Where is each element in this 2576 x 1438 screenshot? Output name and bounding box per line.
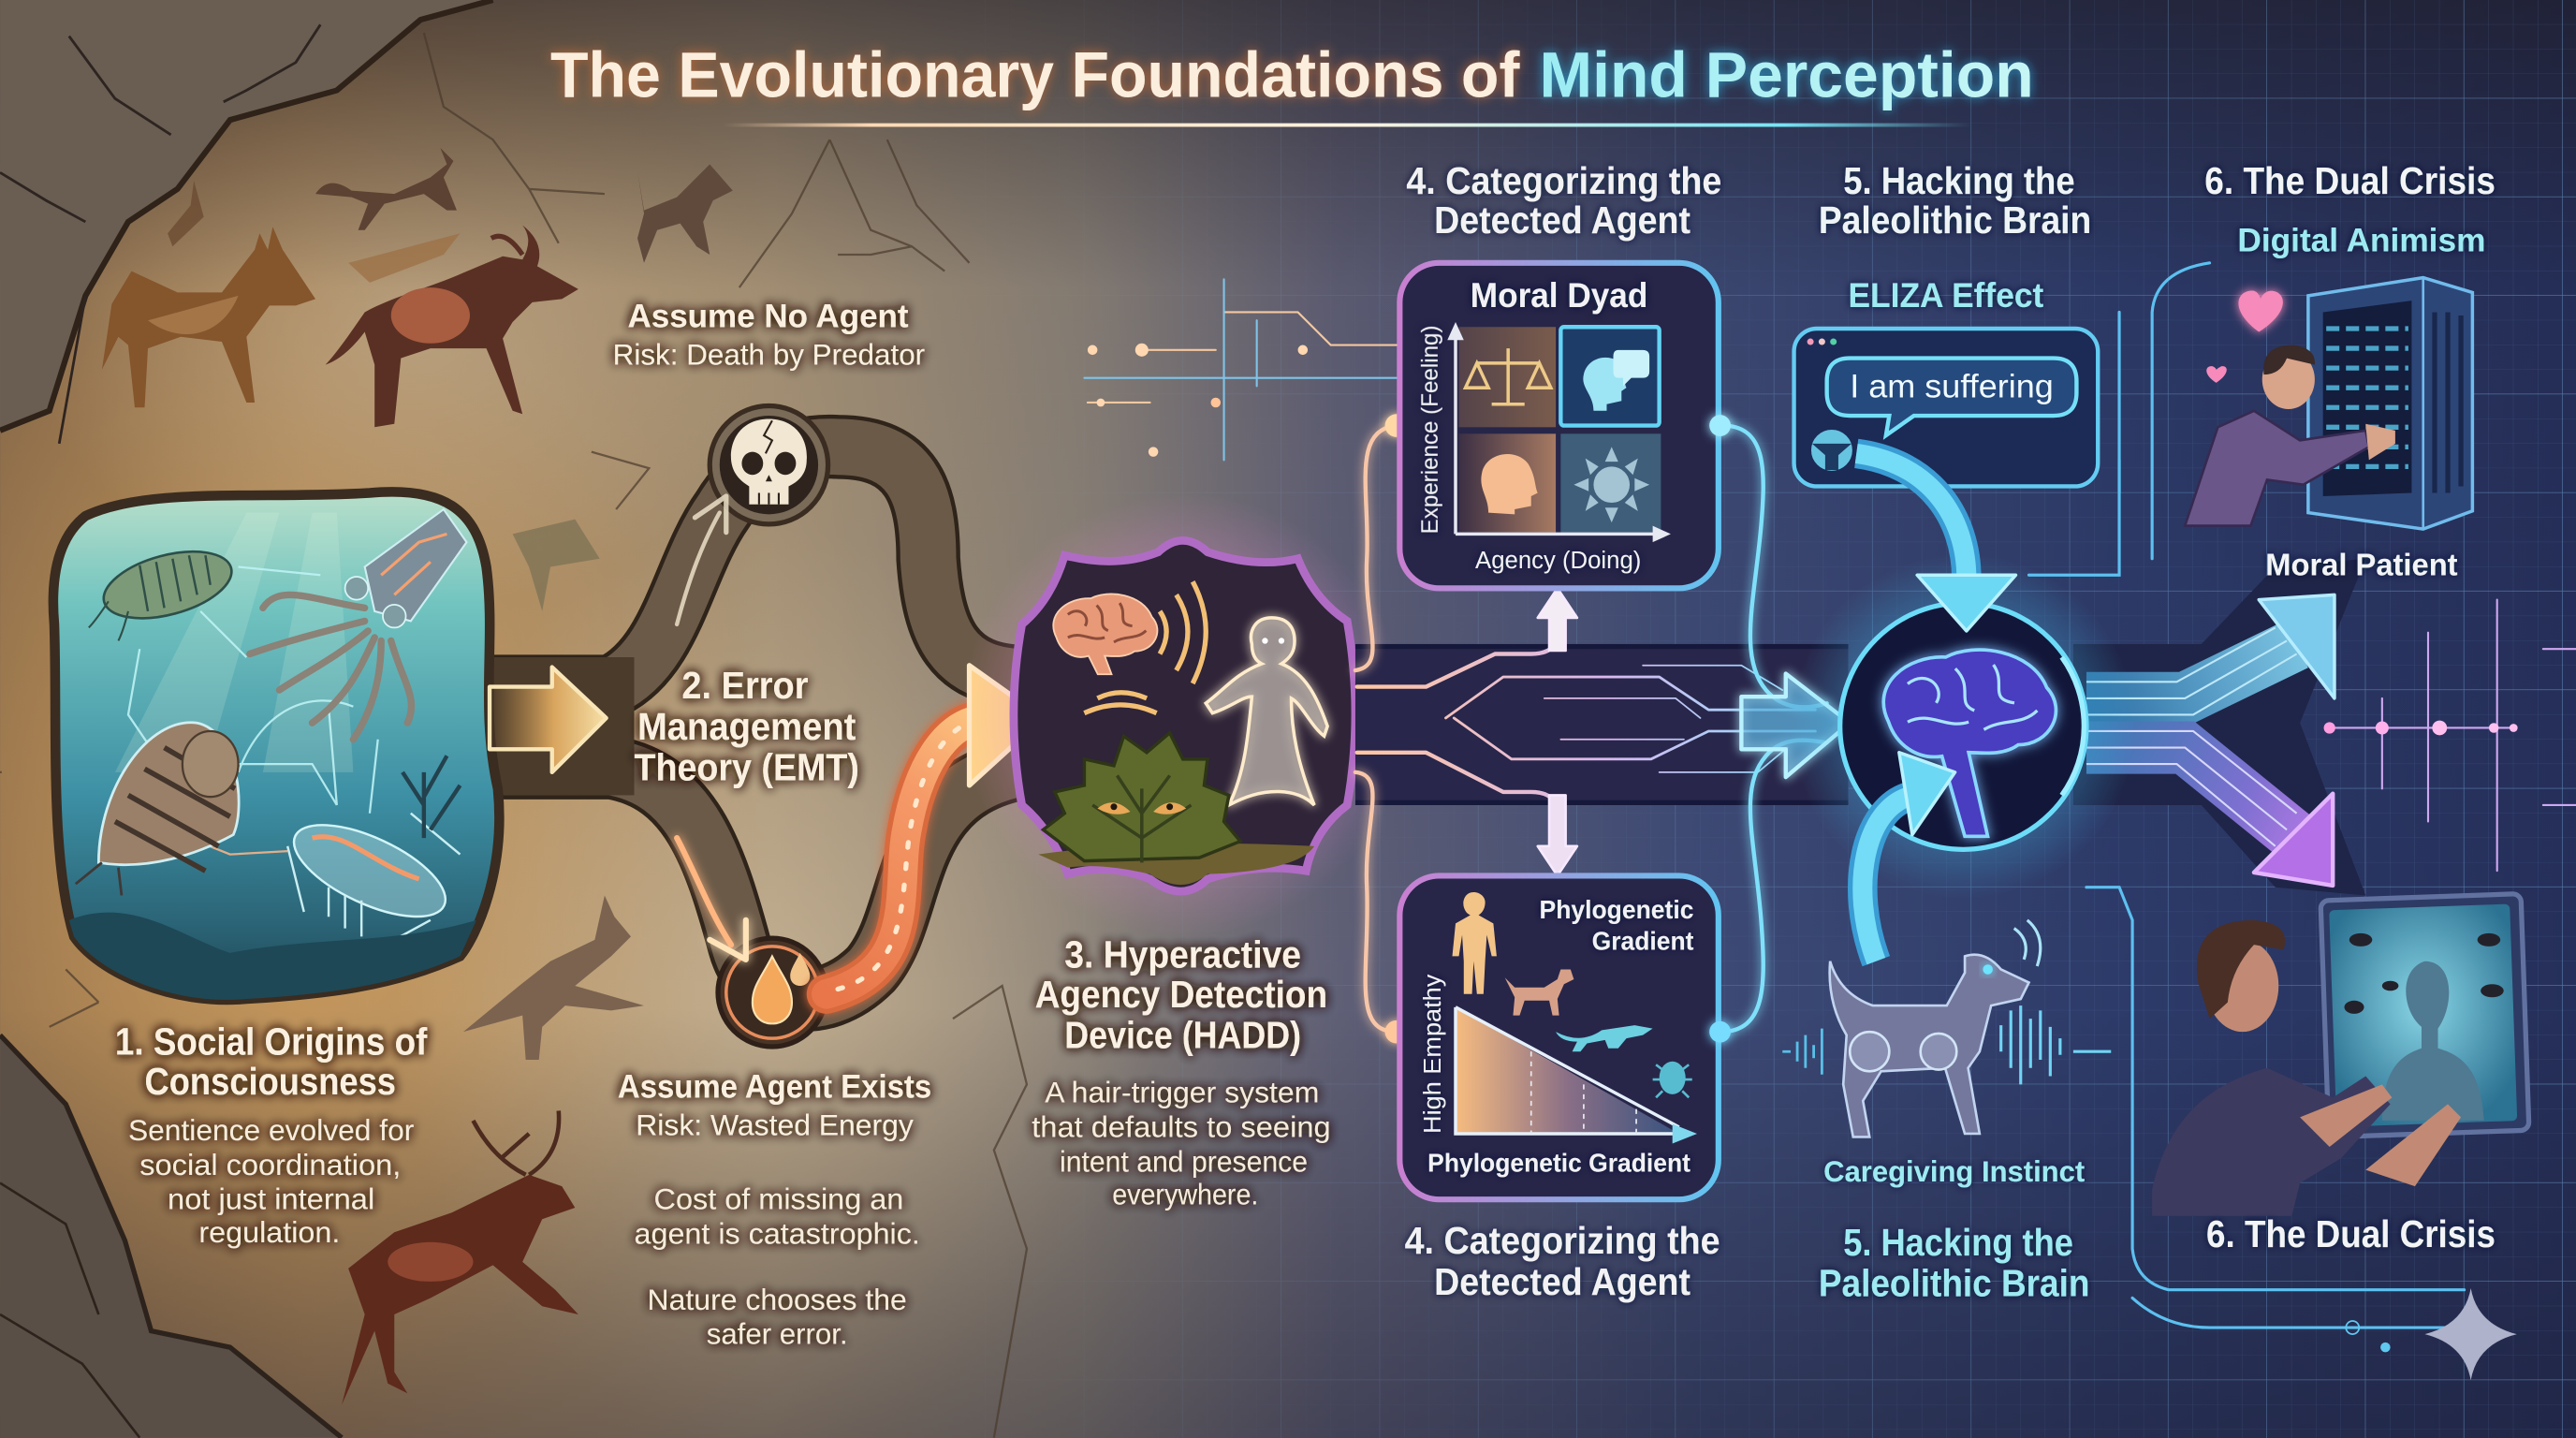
icon: robot dog [1782,920,2111,1137]
cave painting: small horse [637,165,733,263]
cave painting: large goat [326,225,578,427]
heading: hacking bottom: 5. Hacking the [1843,1221,2073,1264]
quadrants [1459,327,1556,427]
squid with glowing nerves [250,509,466,740]
heading: hacking bottom: Paleolithic Brain [1819,1262,2089,1305]
ground [1038,844,1314,885]
heading: hacking top: 5. Hacking the [1843,159,2075,202]
panel: moral dyad [1399,263,1719,588]
title [550,39,2034,111]
cave painting: brown deer [102,227,315,407]
arrow: chat into brain [1856,453,2015,631]
heading: categorizing bottom: 4. Categorizing the [1405,1219,1720,1262]
text: HADD description: intent and presence [1060,1144,1308,1178]
heading: HADD: Agency Detection [1035,973,1327,1016]
text: HADD description: everywhere. [1112,1177,1258,1211]
circuit traces and dots [1084,263,2576,1328]
label: moral patient: Moral Patient [2265,548,2458,582]
labels: moral dyad [1418,276,1647,574]
chat message: I am suffering [1850,369,2054,405]
glowing orange arrow into HADD [827,666,1044,994]
rock ledge bottom left [0,1035,342,1438]
neon brain [1883,650,2056,836]
waveforms [1782,1029,1822,1075]
label: digital animism: Digital Animism [2237,223,2485,259]
icon: sparkle [2424,1288,2517,1380]
heading: categorizing bottom: Detected Agent [1434,1260,1690,1303]
heading: social origins: 1. Social Origins of [115,1020,428,1064]
text: error management explanation: Cost of missing an [654,1182,903,1216]
labels: moral dyad: Moral Dyad [1471,276,1647,315]
cave painting: faded marks [168,181,600,611]
labels: phylogenetic gradient: Phylogenetic [1540,895,1693,924]
electric signal lines [128,566,378,855]
speech bubble [1827,359,2076,435]
text: error management explanation: Nature chooses the [648,1283,907,1316]
connector lines: orange side [1355,414,1408,1043]
arrow: circuit into brain [1741,674,1850,777]
labels: moral dyad: Experience (Feeling) [1418,325,1443,534]
illustration: person hugging server [2185,278,2472,529]
heading: hacking top: Paleolithic Brain [1819,198,2091,242]
connector lines: blue side [1709,415,1827,1043]
server [2308,278,2472,529]
sound waves [1084,581,1206,713]
text: assume agent exists: Assume Agent Exists [618,1068,931,1105]
title underline [723,124,1971,126]
sea floor and coral [69,913,476,1000]
labels: phylogenetic gradient: Gradient [1592,926,1693,955]
rock ledge top left [0,0,493,444]
central circuit band [1351,594,1848,868]
axes [1447,322,1671,542]
heading: error management theory [634,664,859,789]
icon: head [1481,454,1538,514]
text: error management explanation: safer error. [707,1317,848,1351]
central brain hub [1791,553,2136,899]
heading: categorizing top: 4. Categorizing the [1406,159,1721,202]
light rays [115,513,353,772]
labels: phylogenetic gradient: Phylogenetic Gradient [1427,1148,1690,1177]
text: assume no agent [613,298,925,372]
label: ELIZA effect: ELIZA Effect [1848,276,2043,315]
labels: phylogenetic gradient [1418,895,1693,1177]
man [2185,411,2369,526]
ghost figure [1206,618,1327,805]
on-screen figure [2382,961,2484,1121]
text: error management explanation [634,1182,920,1351]
heading: dual crisis top: 6. The Dual Crisis [2204,159,2496,202]
panel: ELIZA chat window [1794,329,2098,486]
icon: scales [1466,348,1551,404]
arrow: ocean to error paths [490,668,607,772]
avatar [1810,429,1853,472]
illustration: person examining tablet [2152,894,2529,1216]
text: error management explanation: agent is catastrophic. [634,1217,920,1251]
icon: dog [1505,969,1573,1016]
heading: HADD: 3. Hyperactive [1064,933,1301,976]
icon: lizard [1556,1025,1653,1051]
heading: social origins [115,1020,428,1103]
node: skull [710,405,828,524]
title: The Evolutionary Foundations of [550,39,1520,111]
wall cracks [0,33,1027,1438]
label: caregiving instinct: Caregiving Instinct [1823,1154,2086,1188]
panel: phylogenetic gradient [1399,875,1719,1199]
title: Mind Perception [1540,39,2034,111]
panel: ocean origins [53,492,499,1000]
panel: HADD scene [961,493,1405,936]
large trilobite [76,723,239,895]
brain icon [1053,594,1157,674]
text: HADD description [1032,1076,1331,1211]
text: social origins body [128,1113,414,1249]
arrow: up to moral patient [2086,594,2334,714]
arrow: down to dual crisis [2086,731,2333,886]
heading: HADD [1035,933,1327,1057]
small trilobite [89,539,239,640]
icon: sun [1573,447,1649,522]
heading: categorizing top [1406,159,1721,242]
text: assume no agent: Risk: Death by Predator [613,338,925,372]
heading: hacking top [1819,159,2091,242]
text: assume no agent: Assume No Agent [627,298,909,334]
node: energy droplet [718,938,827,1047]
text: HADD description: A hair-trigger system [1045,1076,1319,1109]
heading: error management theory: Management [637,705,856,748]
heading: dual crisis bottom: 6. The Dual Crisis [2206,1212,2496,1255]
text: social origins body: not just internal [168,1182,374,1216]
labels: phylogenetic gradient: High Empathy [1418,974,1446,1134]
text: social origins body: social coordination, [139,1148,401,1181]
stone channel from ocean to error paths [487,447,1027,1000]
text: HADD description: that defaults to seeing [1032,1109,1331,1143]
heart icons [2238,291,2283,332]
heading: social origins: Consciousness [145,1060,396,1103]
arrow: down to droplet [677,838,746,960]
cave painting: red stag [342,1110,578,1405]
bush with eyes [1044,733,1240,861]
translucent shrimp [282,806,460,940]
icon: beetle [1653,1062,1692,1097]
cave painting: small leaping animal [315,148,457,230]
icon: head with speech [1583,358,1627,411]
arrows: up and down to categories [1538,588,1577,875]
labels: moral dyad: Agency (Doing) [1475,546,1641,574]
heading: HADD: Device (HADD) [1064,1014,1301,1057]
arrow: up toward skull [677,496,726,624]
text: assume agent exists [618,1068,931,1142]
cave painting: running canine [463,895,644,1060]
right band behind split arrows [2073,559,2365,895]
icon: human [1453,892,1497,994]
heading: error management theory: 2. Error [681,664,809,707]
man [2152,1068,2391,1216]
heading: hacking bottom [1819,1221,2089,1305]
heading: error management theory: Theory (EMT) [634,746,859,789]
heading: categorizing top: Detected Agent [1434,198,1690,242]
text: assume agent exists: Risk: Wasted Energy [636,1108,914,1142]
text: social origins body: Sentience evolved for [128,1113,414,1147]
arrow: robot dog into brain [1863,753,1955,961]
heading: categorizing bottom [1405,1219,1720,1303]
gradient triangle [1456,1007,1679,1134]
text: social origins body: regulation. [198,1215,340,1249]
